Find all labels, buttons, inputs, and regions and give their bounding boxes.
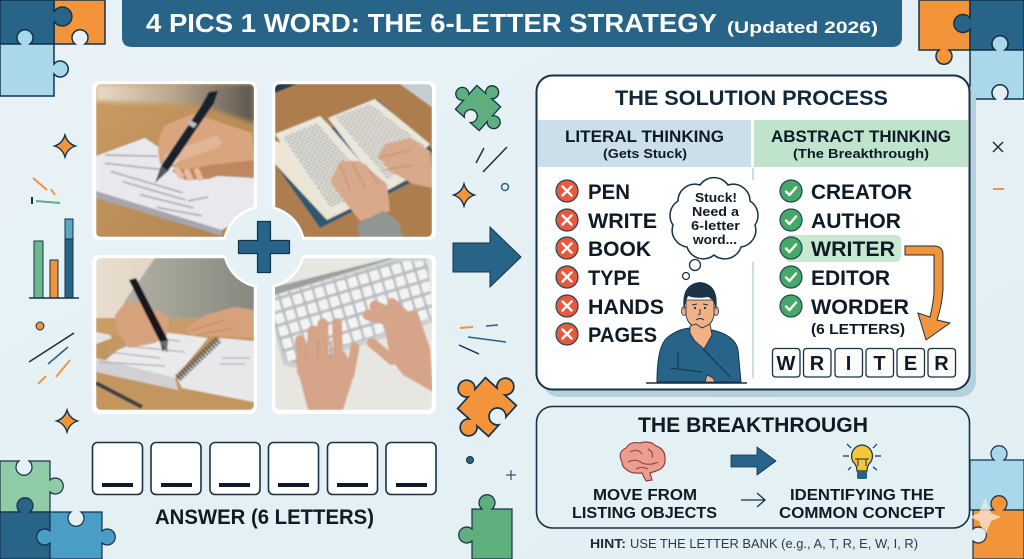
list: abstract words: WORDER xyxy=(811,296,909,319)
list: literal words: WRITE xyxy=(588,210,657,233)
photo panel: typing on keyboard xyxy=(272,255,436,414)
list: abstract words: EDITOR xyxy=(811,267,890,290)
answer label: ANSWER (6 LETTERS) xyxy=(155,506,374,529)
photo panel: hands on open book xyxy=(272,81,436,240)
answer tiles: writer: E xyxy=(904,353,917,375)
title banner xyxy=(122,0,902,47)
puzzle piece: bottom centre green xyxy=(459,495,512,559)
icon: brain xyxy=(620,442,665,481)
title banner: (Updated 2026) xyxy=(727,18,878,37)
plus sign badge xyxy=(222,206,306,288)
list: literal words: TYPE xyxy=(588,267,640,290)
answer tiles: writer: R xyxy=(810,353,825,375)
sparkle and dash decorations centre xyxy=(454,147,516,480)
puzzle corner: top right xyxy=(919,0,1024,99)
sparkle and dash decorations left xyxy=(29,135,78,432)
icon: light bulb xyxy=(843,444,881,479)
column: literal thinking header: (Gets Stuck) xyxy=(603,146,687,161)
list: literal words: BOOK xyxy=(588,238,651,261)
writer highlight xyxy=(785,235,901,262)
text: move from listing objects: MOVE FROM xyxy=(593,487,697,504)
column: literal thinking header xyxy=(538,120,751,167)
text: move from listing objects: LISTING OBJECTS xyxy=(572,505,717,522)
photo panel: writing in spiral notebook xyxy=(92,255,257,414)
column: abstract thinking header xyxy=(754,120,968,167)
list: abstract words xyxy=(780,180,912,338)
puzzle corner: top left xyxy=(0,0,105,96)
answer letter boxes xyxy=(92,442,436,494)
puzzle corner: bottom right xyxy=(969,446,1024,559)
column: abstract thinking header: (The Breakthrough) xyxy=(793,146,929,161)
thought bubble: Need a xyxy=(692,204,740,219)
list: abstract words: CREATOR xyxy=(811,181,912,204)
list: literal words xyxy=(556,180,664,347)
list: abstract words: AUTHOR xyxy=(811,210,901,233)
text: move from listing objects xyxy=(572,487,717,522)
thought bubble: 6-letter xyxy=(691,218,740,233)
title banner: 4 PICS 1 WORD: THE 6-LETTER STRATEGY xyxy=(146,8,717,38)
icon: arrow xyxy=(731,447,776,475)
column: abstract thinking header: ABSTRACT THINKING xyxy=(771,127,951,146)
hint line: HINT: xyxy=(590,537,626,551)
list: literal words: PAGES xyxy=(588,324,657,347)
answer tiles: writer: R xyxy=(934,353,949,375)
green puzzle piece xyxy=(447,69,517,138)
text: identifying the common concept xyxy=(779,487,945,522)
thin arrow xyxy=(741,493,765,507)
answer tiles: writer xyxy=(772,348,956,377)
panel heading: THE SOLUTION PROCESS xyxy=(615,87,888,110)
big arrow to solution xyxy=(453,227,521,287)
thinking person xyxy=(646,282,747,383)
hint line: USE THE LETTER BANK (e.g., A, T, R, E, W, I, R) xyxy=(630,537,918,551)
thought bubble: word... xyxy=(692,232,737,247)
list: literal words: PEN xyxy=(588,181,630,204)
text: identifying the common concept: COMMON CONCEPT xyxy=(779,505,945,522)
thought bubble xyxy=(670,178,758,280)
photo panel: hand writing on paper xyxy=(92,81,257,240)
answer tiles: writer: I xyxy=(846,353,851,375)
answer tiles: writer: W xyxy=(777,353,796,375)
column: literal thinking header: LITERAL THINKING xyxy=(565,127,724,146)
thought bubble: Stuck! xyxy=(695,190,737,205)
list: abstract words: WRITER xyxy=(811,238,895,261)
bar chart icon xyxy=(29,219,79,298)
puzzle corner: bottom left xyxy=(0,461,115,559)
panel: the breakthrough xyxy=(536,406,970,528)
list: abstract words: (6 LETTERS) xyxy=(811,321,905,338)
list: literal words: HANDS xyxy=(588,296,664,319)
panel: the solution process xyxy=(536,76,976,397)
decorations right xyxy=(993,142,1004,189)
answer tiles: writer: T xyxy=(873,353,886,375)
text: identifying the common concept: IDENTIFYING THE xyxy=(790,487,934,504)
breakthrough heading: THE BREAKTHROUGH xyxy=(638,414,868,437)
orange arrow to answer xyxy=(905,246,950,340)
orange puzzle piece xyxy=(436,356,526,448)
